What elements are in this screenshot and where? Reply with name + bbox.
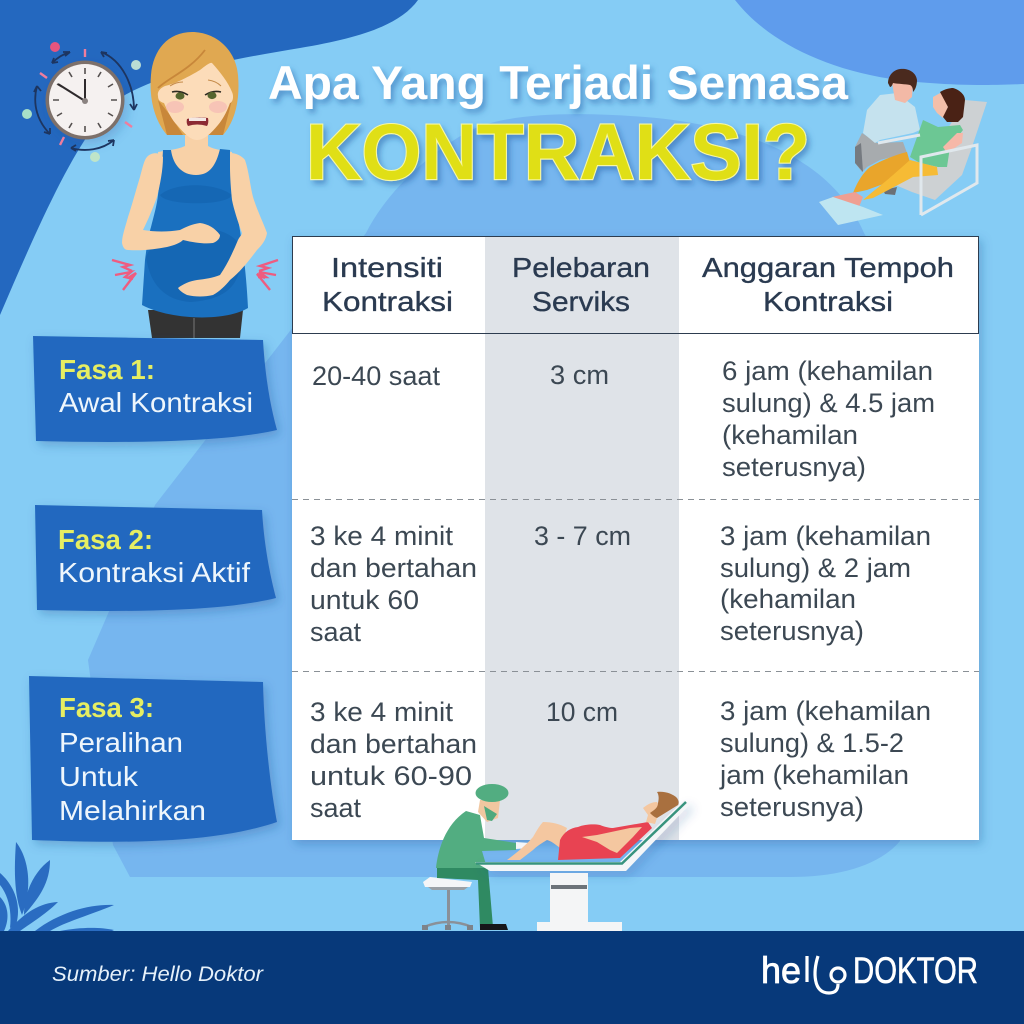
- table header: Pelebaran: [512, 252, 650, 283]
- pillow: [819, 197, 883, 225]
- phase label 2: [35, 505, 276, 611]
- delivery bed: [475, 800, 690, 931]
- doctor: [436, 784, 530, 930]
- woman: [832, 88, 965, 212]
- table panel: [292, 236, 979, 840]
- phase label 3: Fasa 3:: [59, 692, 154, 723]
- row 1: 3 cm: [550, 360, 609, 390]
- row 2: 3 jam (kehamilan: [720, 521, 931, 551]
- row 1: sulung) & 4.5 jam: [722, 388, 935, 418]
- logo: [761, 950, 978, 993]
- hair back: [151, 32, 238, 135]
- illustration: delivery scene: [422, 784, 690, 931]
- row 3: jam (kehamilan: [719, 760, 909, 790]
- phase label 3: [29, 676, 277, 842]
- phase label 3: Untuk: [59, 761, 139, 792]
- row 2: 3 ke 4 minit: [310, 521, 454, 551]
- stool: [422, 877, 473, 930]
- neck and shoulders: [158, 125, 232, 180]
- row 3: saat: [310, 793, 361, 823]
- icon: plant leaves: [0, 842, 114, 931]
- row 3: untuk 60-90: [310, 761, 472, 791]
- row 3: dan bertahan: [310, 729, 477, 759]
- face: [158, 63, 233, 140]
- table header: [322, 252, 954, 317]
- footer bar: [0, 931, 1024, 1024]
- illustration: pregnant woman: [112, 32, 278, 338]
- row 2: seterusnya): [720, 616, 864, 646]
- row 1: (kehamilan: [722, 420, 858, 450]
- row 3: [310, 696, 931, 823]
- row 2: [310, 521, 931, 647]
- source note: Sumber: Hello Doktor: [52, 963, 264, 986]
- table header: Kontraksi: [322, 286, 453, 317]
- phase label 3: Peralihan: [59, 727, 183, 758]
- title: [268, 56, 849, 196]
- row 3: seterusnya): [720, 792, 864, 822]
- icon: rotation arrows: [34, 52, 137, 151]
- middle column shading: [485, 236, 679, 840]
- row 1: [312, 356, 935, 482]
- row 1: 20-40 saat: [312, 361, 440, 391]
- pink ticks: [40, 49, 132, 145]
- logo: he: [761, 950, 801, 991]
- row 3: 3 ke 4 minit: [310, 697, 454, 727]
- man: [855, 69, 920, 195]
- row 1: seterusnya): [722, 452, 866, 482]
- illustration: clock with arrows: [22, 42, 141, 162]
- tank top: [142, 149, 248, 317]
- title line 2: KONTRAKSI?: [306, 107, 810, 196]
- chair back and seat: [893, 100, 987, 200]
- pain marks: [112, 260, 278, 290]
- phase label 3: Melahirkan: [59, 795, 206, 826]
- header border: [292, 236, 978, 334]
- phase label 1: Fasa 1:: [59, 354, 155, 385]
- row 3: 10 cm: [546, 697, 618, 727]
- phase label 1: [33, 336, 277, 442]
- phase label 2: Fasa 2:: [58, 524, 153, 555]
- row dividers: [292, 500, 979, 672]
- chair frame: [878, 135, 977, 215]
- row 2: (kehamilan: [720, 584, 856, 614]
- illustration: couple on chair: [819, 69, 987, 225]
- table header: Serviks: [532, 286, 630, 317]
- phase label 1: Awal Kontraksi: [59, 387, 253, 418]
- title line 1: Apa Yang Terjadi Semasa: [268, 56, 849, 109]
- logo: DOKTOR: [853, 950, 978, 991]
- eyes and mouth: [172, 91, 188, 95]
- row 2: saat: [310, 617, 361, 647]
- table header: Anggaran Tempoh: [702, 252, 954, 283]
- row 2: sulung) & 2 jam: [720, 553, 911, 583]
- table header: Intensiti: [331, 252, 443, 283]
- pants: [148, 310, 243, 338]
- row 1: 6 jam (kehamilan: [722, 356, 933, 386]
- clock face: [46, 60, 124, 140]
- phase label 2: Kontraksi Aktif: [58, 557, 250, 588]
- row 2: 3 - 7 cm: [534, 521, 631, 551]
- table header: Kontraksi: [763, 286, 893, 317]
- row 2: dan bertahan: [310, 553, 477, 583]
- hair fringe line: [158, 50, 205, 88]
- pregnant patient: [507, 792, 679, 860]
- row 3: sulung) & 1.5-2: [720, 728, 904, 758]
- row 3: 3 jam (kehamilan: [720, 696, 931, 726]
- arms and hands: [122, 153, 220, 250]
- row 2: untuk 60: [310, 585, 419, 615]
